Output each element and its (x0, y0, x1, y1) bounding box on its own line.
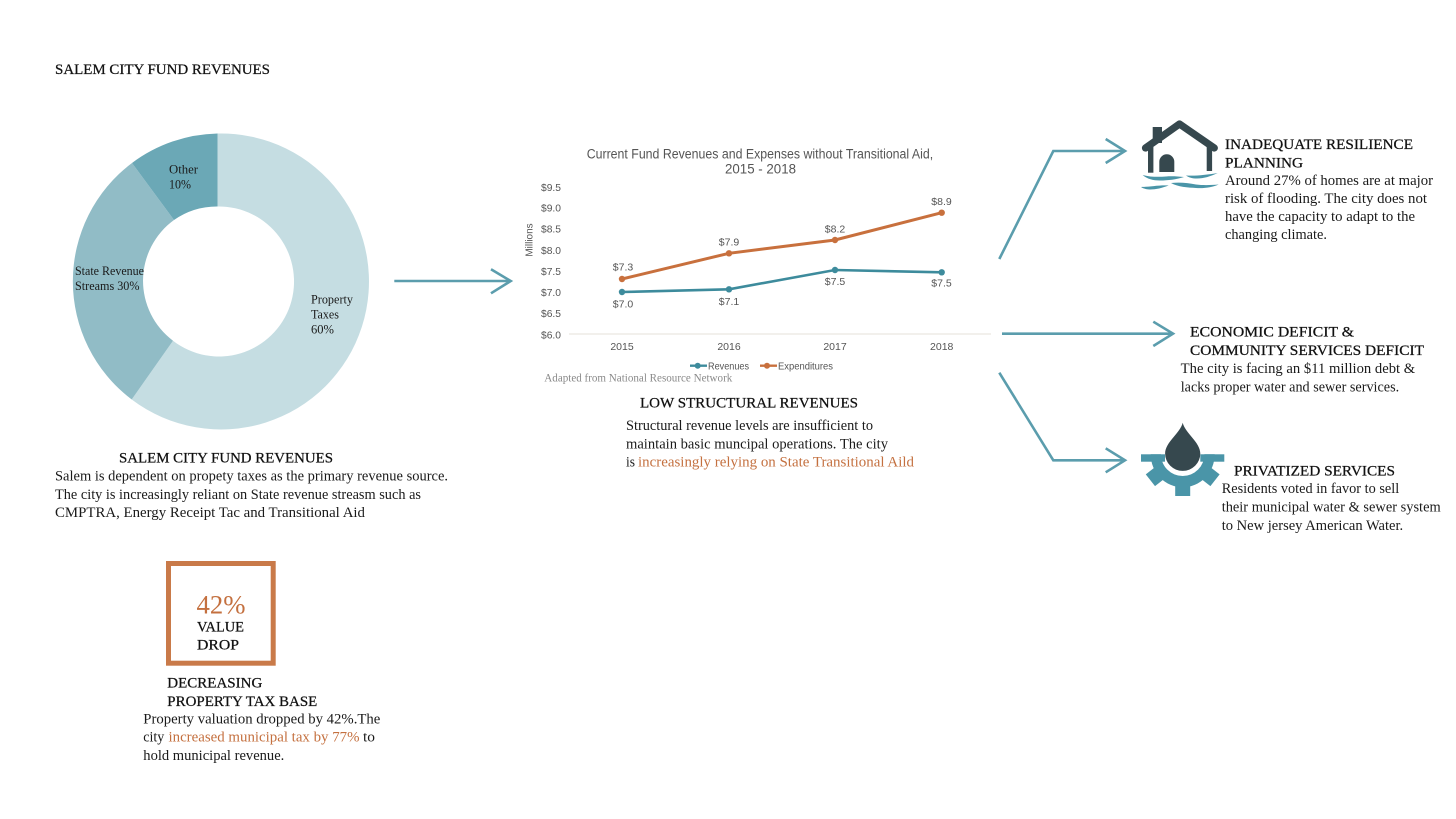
body (143, 712, 380, 764)
label: other: 10% (169, 178, 191, 192)
arrow: to privatized services (999, 373, 1125, 472)
label: other: Other (169, 162, 199, 176)
label: property taxes: Property (311, 292, 354, 306)
legend: Revenues (708, 362, 749, 372)
body: Salem is dependent on propety taxes as the primary revenue source. (55, 468, 448, 484)
donut chart (73, 133, 369, 429)
body: CMPTRA, Energy Receipt Tac and Transitional Aid (55, 505, 366, 521)
body (1225, 173, 1433, 243)
heading (1190, 325, 1424, 359)
y axis labels: $7.0 (541, 287, 561, 299)
chart title: 2015 - 2018 (725, 162, 796, 176)
label: property taxes: 60% (311, 322, 334, 336)
slice: property taxes 60% (132, 133, 369, 429)
body: risk of flooding. The city does not (1225, 191, 1427, 207)
body (55, 468, 448, 521)
data labels: expenditures: $7.9 (719, 236, 739, 248)
y axis title: Millions (524, 223, 536, 257)
text block: privatized services (1222, 464, 1441, 534)
heading: INADEQUATE RESILIENCE (1225, 137, 1413, 153)
heading (1225, 137, 1413, 171)
y axis labels: $9.0 (541, 202, 561, 214)
y axis labels: $6.0 (541, 329, 561, 341)
y axis labels: $6.5 (541, 308, 561, 320)
data labels: revenues: $7.0 (613, 299, 633, 311)
body: The city is increasingly reliant on State revenue streasm such as (55, 487, 421, 503)
heading: LOW STRUCTURAL REVENUES (640, 396, 858, 412)
caption (197, 620, 244, 654)
data labels: expenditures: $7.3 (613, 262, 633, 274)
callout frame (168, 564, 273, 663)
body: Residents voted in favor to sell (1222, 481, 1399, 497)
callout: 42% value drop (168, 564, 273, 663)
body: changing climate. (1225, 227, 1327, 243)
body: Around 27% of homes are at major (1225, 173, 1433, 189)
data labels: expenditures (613, 196, 952, 274)
body: to New jersey American Water. (1222, 518, 1403, 534)
y axis labels (541, 182, 561, 341)
data labels: expenditures: $8.2 (825, 223, 845, 235)
house (1146, 124, 1214, 173)
series: revenues (619, 267, 945, 295)
body: hold municipal revenue. (143, 748, 284, 764)
arrow: donut to line chart (394, 269, 511, 293)
body: maintain basic muncipal operations. The city (626, 436, 889, 452)
text block: decreasing property tax base (143, 676, 380, 764)
body: have the capacity to adapt to the (1225, 209, 1415, 225)
heading: PLANNING (1225, 155, 1304, 171)
body: increasingly relying on State Transitional Aild (638, 455, 915, 471)
slice: other 10% (132, 134, 218, 220)
body: is (626, 455, 635, 471)
label: property taxes: Taxes (311, 308, 339, 322)
heading: DECREASING (167, 676, 263, 692)
icon: flooded house (1141, 124, 1219, 190)
data labels: expenditures: $8.9 (931, 196, 952, 208)
body: Property valuation dropped by 42%.The (143, 712, 380, 728)
water drop (1165, 423, 1200, 471)
gear (1141, 454, 1224, 496)
body (1181, 361, 1416, 396)
water waves (1141, 173, 1219, 190)
data labels: revenues: $7.1 (719, 296, 739, 308)
label: state revenue streams: Streams 30% (75, 279, 140, 293)
heading (167, 676, 317, 710)
text block: economic deficit (1181, 325, 1424, 396)
x axis labels: 2016 (717, 341, 741, 353)
chart title: Current Fund Revenues and Expenses without Transitional Aid, (587, 146, 933, 162)
body: to (363, 730, 375, 746)
data labels: revenues: $7.5 (931, 278, 952, 290)
data labels: revenues (613, 276, 952, 311)
slice: state revenue streams 30% (73, 163, 174, 400)
label: state revenue streams (75, 264, 144, 293)
text block: inadequate resilience planning (1225, 137, 1433, 243)
label: state revenue streams: State Revenue (75, 264, 144, 278)
legend: Expenditures (778, 362, 833, 372)
label: property taxes (311, 292, 354, 336)
y axis labels: $7.5 (541, 266, 561, 278)
y axis labels: $8.0 (541, 245, 561, 257)
text block: salem city fund revenues (55, 450, 448, 521)
figure: 42% (196, 590, 246, 620)
body: their municipal water & sewer system (1222, 500, 1441, 516)
data labels: revenues: $7.5 (825, 276, 845, 288)
label: other (169, 162, 199, 192)
x axis labels: 2017 (823, 341, 847, 353)
heading: PRIVATIZED SERVICES (1234, 464, 1395, 480)
x axis labels: 2015 (610, 341, 634, 353)
body: city (143, 730, 165, 746)
y axis labels: $9.5 (541, 182, 561, 194)
arrow: to resilience planning (999, 139, 1125, 259)
y axis labels: $8.5 (541, 224, 561, 236)
body: The city is facing an $11 million debt & (1181, 361, 1416, 377)
body (626, 418, 915, 471)
heading: ECONOMIC DEFICIT & (1190, 325, 1355, 341)
body: lacks proper water and sewer services. (1181, 380, 1399, 396)
body: Structural revenue levels are insufficient to (626, 418, 873, 434)
x axis labels (610, 341, 954, 353)
legend (690, 362, 833, 372)
chart title (587, 146, 933, 176)
text block: low structural revenues (626, 396, 915, 471)
x axis labels: 2018 (930, 341, 954, 353)
body (1222, 481, 1441, 534)
caption: VALUE (197, 620, 244, 636)
heading: COMMUNITY SERVICES DEFICIT (1190, 343, 1424, 359)
title: SALEM CITY FUND REVENUES (55, 62, 270, 78)
heading: PROPERTY TAX BASE (167, 694, 317, 710)
caption: DROP (197, 638, 239, 654)
arrow: to economic deficit (1002, 322, 1173, 346)
body: increased municipal tax by 77% (168, 730, 360, 746)
source note: Adapted from National Resource Network (544, 371, 732, 385)
heading: SALEM CITY FUND REVENUES (119, 450, 333, 466)
line chart (524, 146, 991, 372)
series: expenditures (619, 210, 945, 282)
icon: water drop and gear (1141, 423, 1224, 496)
